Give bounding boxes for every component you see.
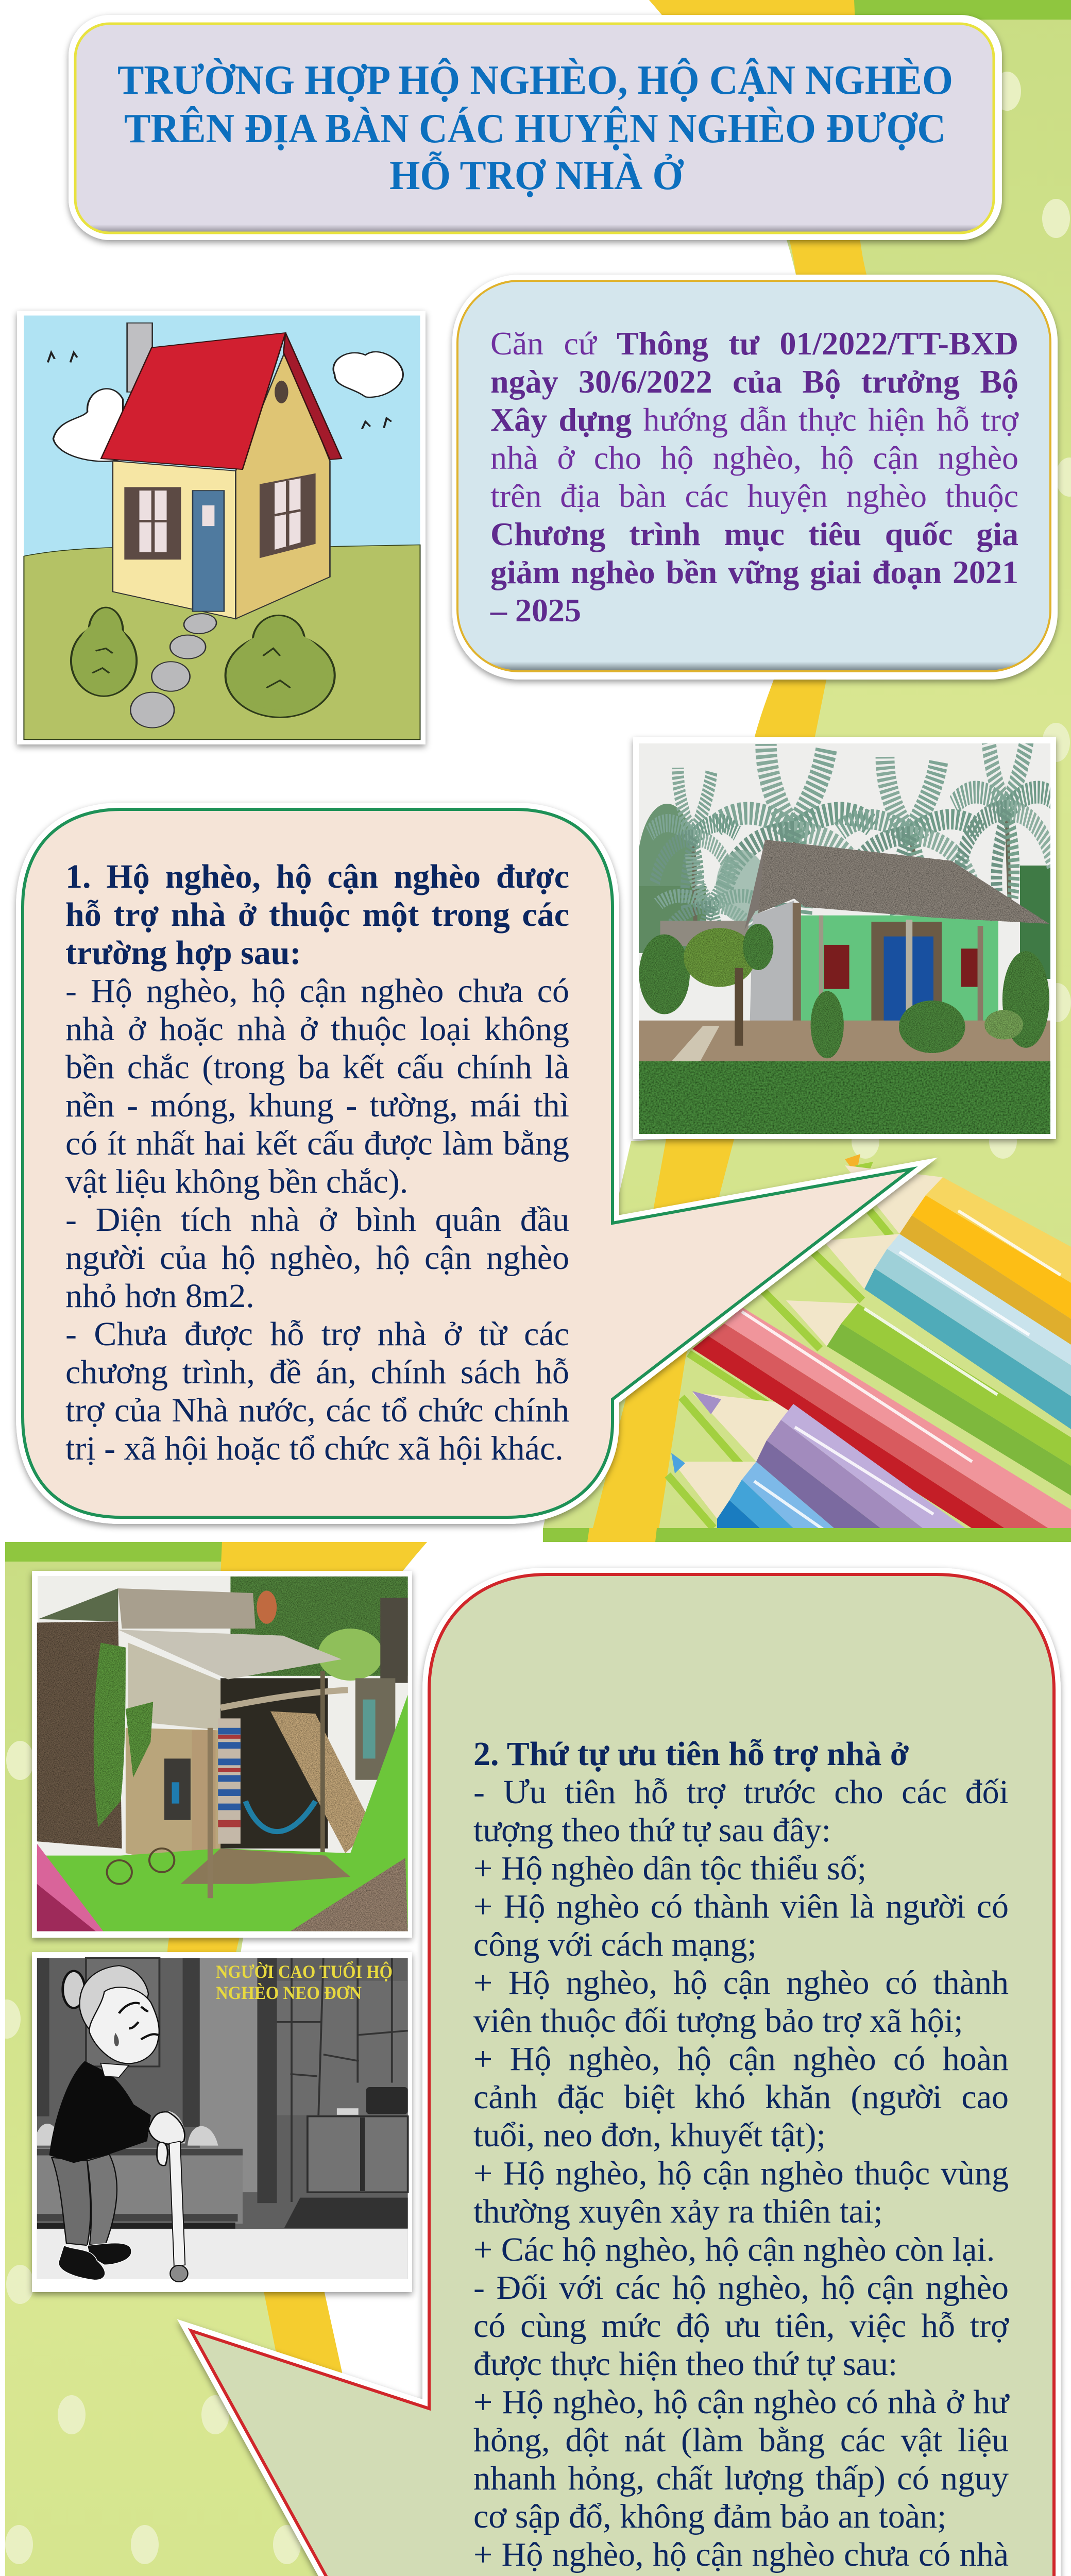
text block: section 2 priority order: - Đối với các hộ nghèo, hộ cận nghèo bbox=[473, 2269, 1009, 2307]
photo caption: NGHÈO NEO ĐƠN bbox=[216, 1982, 362, 2003]
text block: section 1 conditions: 1. Hộ nghèo, hộ cận nghèo được bbox=[65, 858, 569, 895]
text block: section 2 priority order: tuổi, neo đơn, khuyết tật); bbox=[473, 2116, 826, 2154]
text block: legal basis introduction: nhà ở cho hộ nghèo, hộ cận nghèo bbox=[490, 439, 1018, 476]
background: upper panel with yellow stripe, dots and pencils bbox=[543, 0, 1071, 1546]
text block: section 2 priority order: cơ sập đổ, không đảm bảo an toàn; bbox=[473, 2498, 946, 2535]
text block: legal basis introduction: Xây dựng hướng dẫn thực hiện hỗ trợ bbox=[490, 401, 1018, 438]
image: cartoon house bbox=[17, 311, 426, 744]
panel: callout 1 speech bubble bbox=[23, 809, 912, 1517]
text block: section 2 priority order: - Ưu tiên hỗ trợ trước cho các đối bbox=[473, 1773, 1009, 1811]
photo caption: NGƯỜI CAO TUỔI HỘ bbox=[216, 1961, 393, 1982]
text block: section 1 conditions: chương trình, đề án, chính sách hỗ bbox=[65, 1353, 569, 1391]
text block: section 1 conditions: có ít nhất hai kết cấu được làm bằng bbox=[65, 1125, 569, 1162]
text block: section 2 priority order: + Hộ nghèo, hộ cận nghèo có nhà ở hư bbox=[473, 2383, 1009, 2421]
text block: legal basis introduction: trên địa bàn các huyện nghèo thuộc bbox=[490, 478, 1018, 514]
text block: legal basis introduction: giảm nghèo bền vững giai đoạn 2021 bbox=[490, 554, 1018, 590]
text block: section 1 conditions: trợ của Nhà nước, các tổ chức chính bbox=[65, 1392, 569, 1429]
text block: section 1 conditions: - Diện tích nhà ở bình quân đầu bbox=[65, 1201, 569, 1239]
panel: title box bbox=[69, 15, 1002, 240]
title: HỖ TRỢ NHÀ Ở bbox=[389, 151, 684, 198]
text block: section 2 priority order: được thực hiện theo thứ tự sau: bbox=[473, 2345, 897, 2383]
text block: legal basis introduction: Căn cứ Thông tư 01/2022/TT-BXD bbox=[490, 325, 1018, 362]
text block: section 1 conditions: nhà ở hoặc nhà ở thuộc loại không bbox=[65, 1010, 569, 1048]
text block: section 2 priority order: 2. Thứ tự ưu tiên hỗ trợ nhà ở bbox=[473, 1735, 909, 1773]
text block: section 2 priority order: + Hộ nghèo, hộ cận nghèo có hoàn bbox=[473, 2040, 1009, 2078]
text block: section 2 priority order: nhanh hỏng, chất lượng thấp) có nguy bbox=[473, 2460, 1009, 2497]
text block: section 2 priority order: viên thuộc đối tượng bảo trợ xã hội; bbox=[473, 2002, 963, 2040]
text block: section 2 priority order bbox=[473, 1735, 1010, 2576]
text block: section 1 conditions: - Hộ nghèo, hộ cận nghèo chưa có bbox=[65, 972, 569, 1010]
text block: section 2 priority order: thường xuyên xảy ra thiên tai; bbox=[473, 2193, 883, 2230]
text block: legal basis introduction: – 2025 bbox=[490, 592, 581, 629]
title: TRƯỜNG HỢP HỘ NGHÈO, HỘ CẬN NGHÈO bbox=[117, 58, 953, 103]
title: TRÊN ĐỊA BÀN CÁC HUYỆN NGHÈO ĐƯỢC bbox=[124, 106, 946, 151]
text block: section 1 conditions: trường hợp sau: bbox=[65, 934, 301, 972]
text block: section 2 priority order: hỏng, dột nát (làm bằng các vật liệu bbox=[473, 2421, 1009, 2459]
text block: section 1 conditions: vật liệu không bền chắc). bbox=[65, 1163, 408, 1200]
text block: section 2 priority order: + Hộ nghèo có thành viên là người có bbox=[473, 1888, 1009, 1925]
text block: section 2 priority order: có cùng mức độ ưu tiên, việc hỗ trợ bbox=[473, 2307, 1009, 2345]
text block: section 2 priority order: + Hộ nghèo dân tộc thiểu số; bbox=[473, 1850, 866, 1887]
text block: section 1 conditions: hỗ trợ nhà ở thuộc một trong các bbox=[65, 896, 569, 934]
text block: section 1 conditions: trị - xã hội hoặc tổ chức xã hội khác. bbox=[65, 1430, 564, 1467]
text block: section 1 conditions: nhỏ hơn 8m2. bbox=[65, 1277, 254, 1315]
text block: section 2 priority order: cảnh đặc biệt khó khăn (người cao bbox=[473, 2078, 1009, 2116]
text block: section 2 priority order: + Hộ nghèo, hộ cận nghèo chưa có nhà bbox=[473, 2536, 1009, 2573]
text block: section 1 conditions bbox=[65, 858, 569, 1467]
panel: callout 2 speech bubble bbox=[191, 1574, 1054, 2576]
text block: section 1 conditions: - Chưa được hỗ trợ nhà ở từ các bbox=[65, 1315, 569, 1353]
title bbox=[117, 58, 953, 198]
text block: section 2 priority order: công với cách mạng; bbox=[473, 1926, 757, 1963]
text block: section 2 priority order: + Hộ nghèo, hộ cận nghèo có thành bbox=[473, 1964, 1009, 2002]
text block: section 1 conditions: bền chắc (trong ba kết cấu chính là bbox=[65, 1048, 569, 1086]
text block: section 2 priority order: + Các hộ nghèo, hộ cận nghèo còn lại. bbox=[473, 2231, 995, 2268]
background: lower mirrored panel with yellow stripe, dots and pencils bbox=[5, 1542, 427, 2576]
image: thatched house photo bbox=[633, 723, 1059, 1139]
text block: section 1 conditions: người của hộ nghèo, hộ cận nghèo bbox=[65, 1239, 569, 1277]
text block: section 2 priority order: + Hộ nghèo, hộ cận nghèo thuộc vùng bbox=[473, 2155, 1009, 2192]
text block: legal basis introduction bbox=[490, 325, 1019, 629]
text block: legal basis introduction: Chương trình mục tiêu quốc gia bbox=[490, 516, 1018, 552]
text block: section 2 priority order: tượng theo thứ tự sau đây: bbox=[473, 1811, 831, 1849]
image: elderly woman cartoon bbox=[32, 1952, 412, 2292]
panel: intro box bbox=[452, 275, 1058, 680]
text block: section 1 conditions: nền - móng, khung - tường, mái thì bbox=[65, 1087, 569, 1124]
photo caption bbox=[216, 1961, 393, 2003]
image: dilapidated shack photo bbox=[32, 1571, 412, 1938]
text block: legal basis introduction: ngày 30/6/2022 của Bộ trưởng Bộ bbox=[490, 363, 1018, 400]
